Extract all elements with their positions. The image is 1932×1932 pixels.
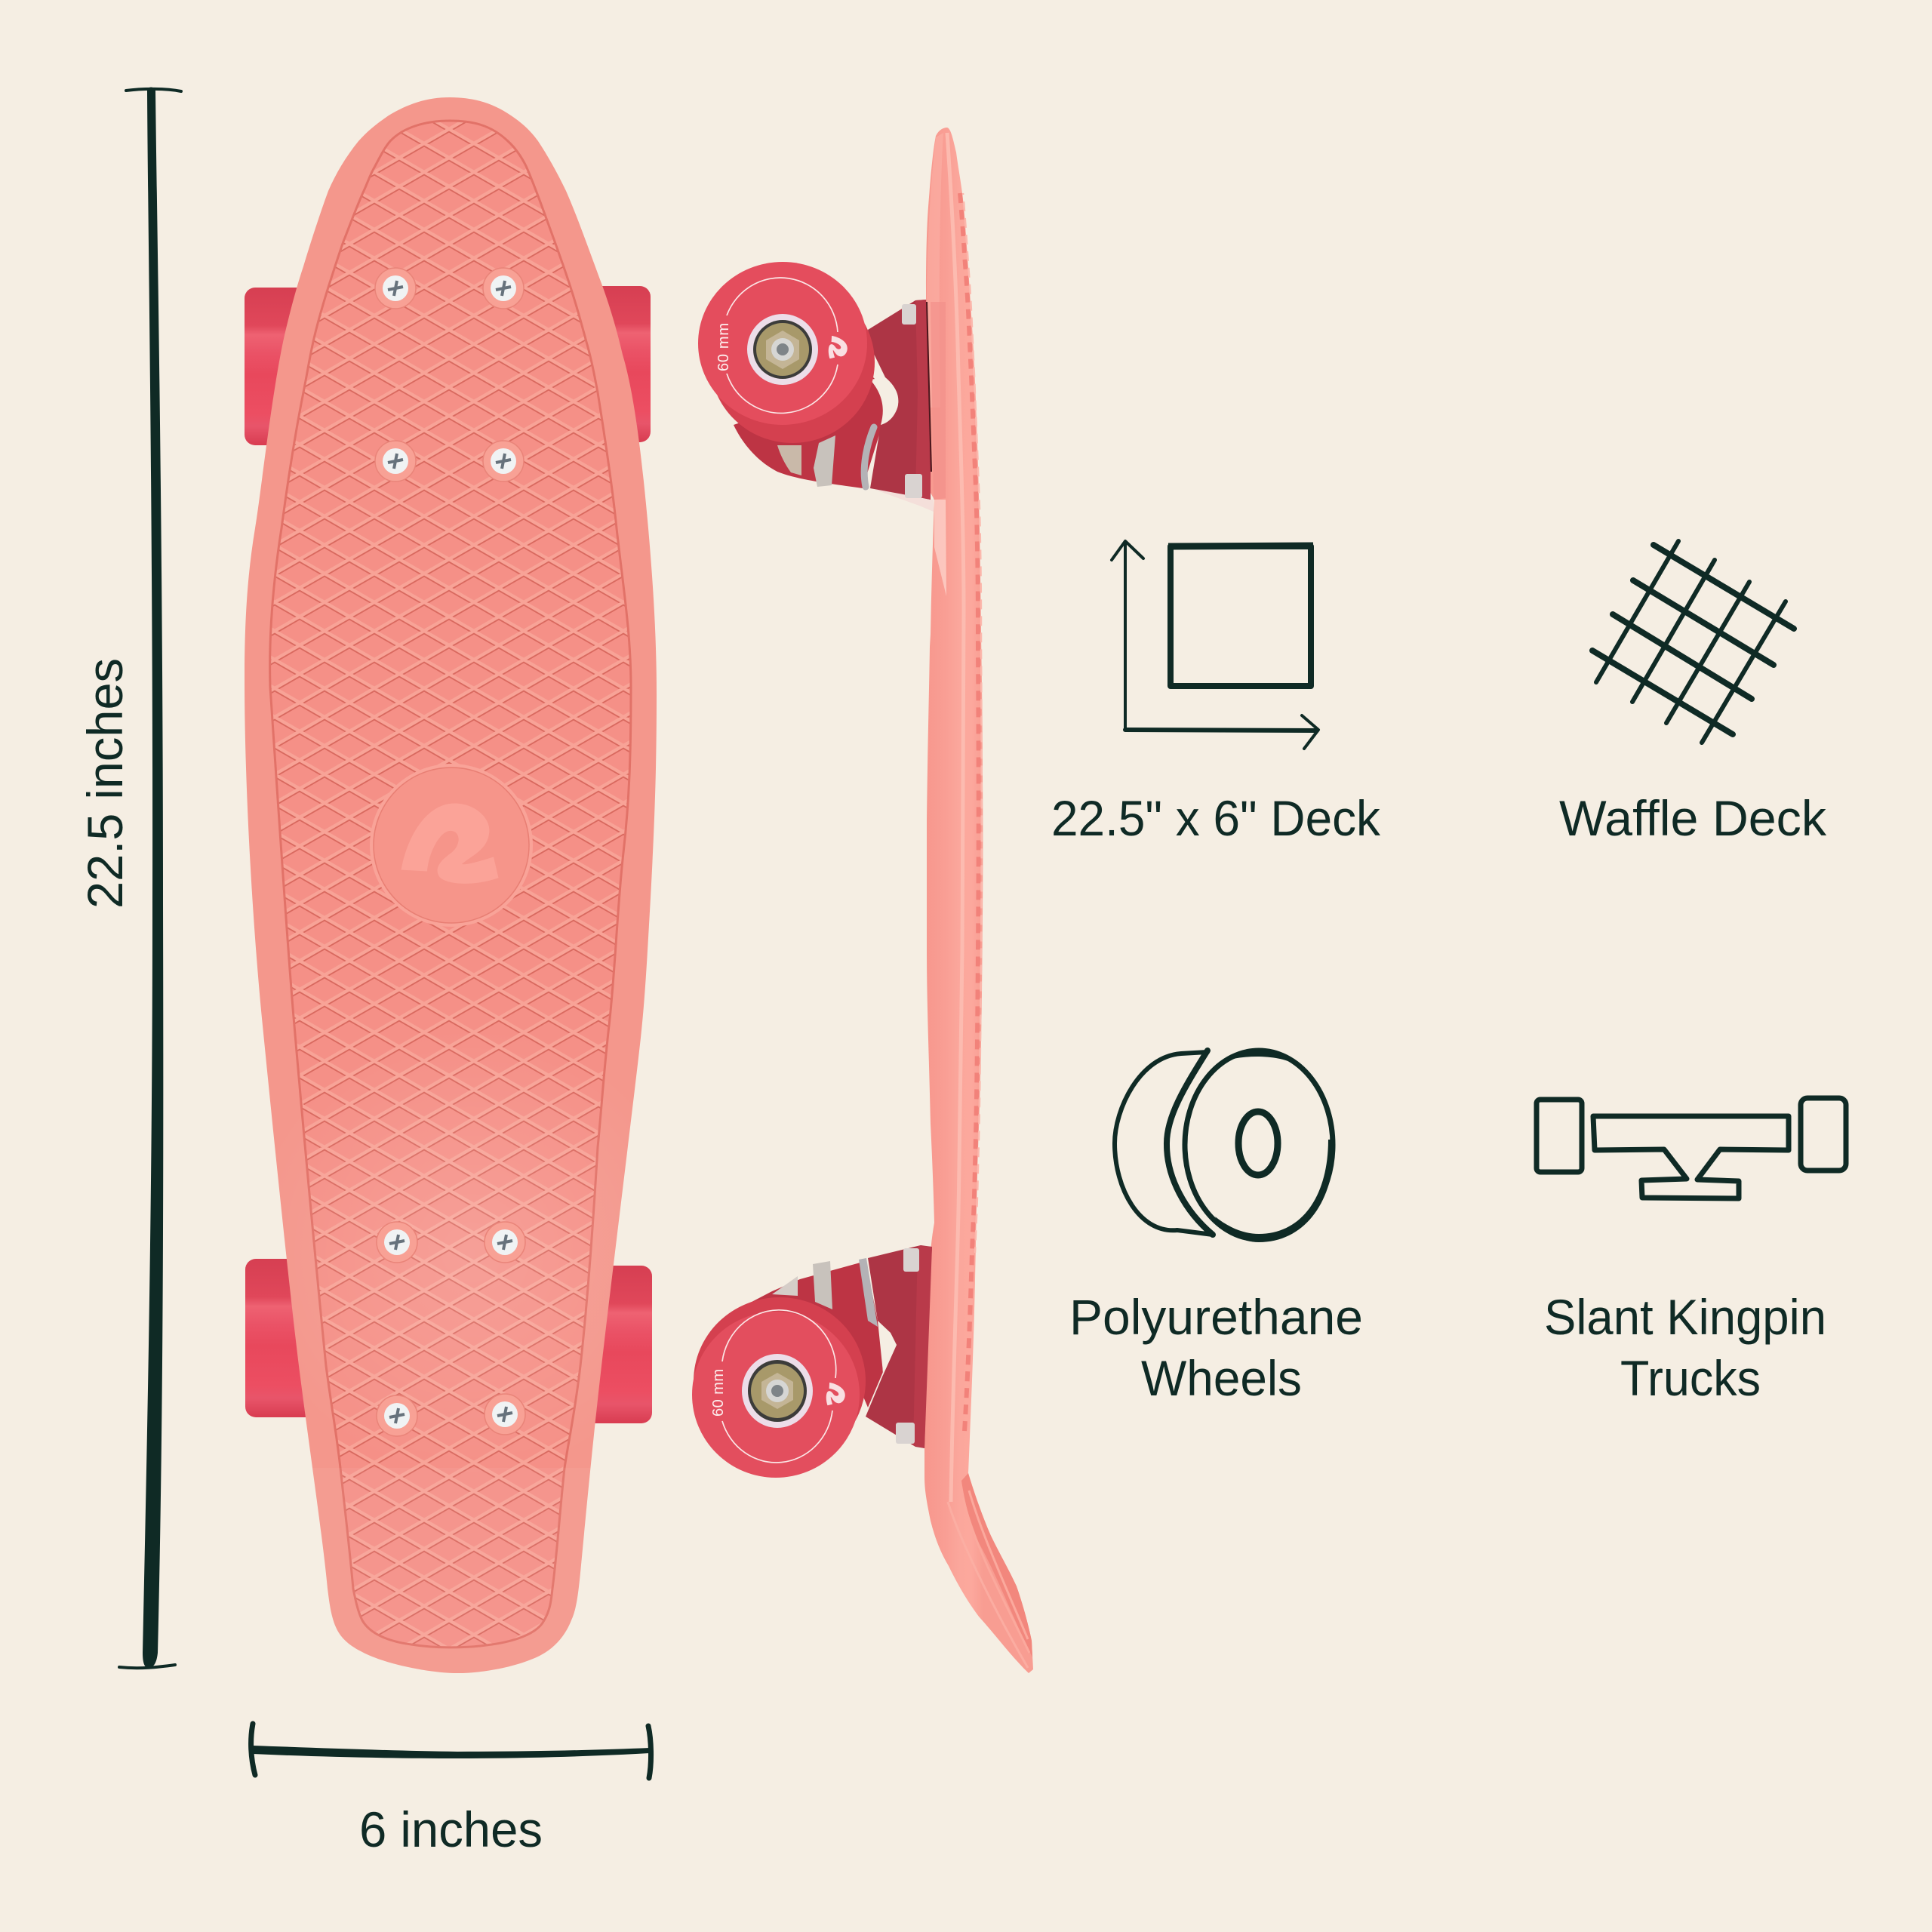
seam <box>927 302 931 472</box>
width label: 6 inches <box>359 1801 543 1857</box>
height measure line <box>143 88 163 1668</box>
label <box>1544 1289 1826 1406</box>
surface highlight <box>331 1112 595 1392</box>
baseplate edge <box>913 1246 932 1448</box>
wheel face <box>698 262 867 425</box>
bushing washer <box>814 435 835 487</box>
label <box>1069 1289 1363 1406</box>
icon: wheel <box>1115 1051 1334 1242</box>
wheel face <box>692 1312 860 1478</box>
kingpin ring <box>859 1258 878 1327</box>
truck mount shadow <box>931 302 946 500</box>
top cap <box>126 89 181 91</box>
glare patch <box>934 500 946 596</box>
kingpin gap <box>870 377 898 425</box>
bolts <box>896 1248 919 1444</box>
lower tail tint <box>242 1468 664 1679</box>
icon: truck <box>1537 1098 1846 1198</box>
baseplate edge <box>915 300 931 500</box>
bearing <box>742 1354 813 1428</box>
wheel body <box>694 1297 866 1465</box>
feature: deck size <box>1051 541 1381 846</box>
kicktail texture <box>948 1473 1032 1668</box>
front truck <box>698 262 934 512</box>
label: Polyurethane <box>1069 1289 1363 1345</box>
bearing <box>747 314 818 385</box>
right cap <box>648 1726 651 1778</box>
nut <box>777 445 801 475</box>
skateboard side view <box>692 128 1033 1673</box>
wheel ring <box>722 1310 836 1463</box>
feature: trucks <box>1537 1098 1846 1406</box>
rear truck <box>692 1245 932 1478</box>
width dimension <box>251 1724 651 1857</box>
hanger <box>734 377 883 488</box>
long highlight <box>947 133 964 1502</box>
deck outline <box>245 97 657 1673</box>
feature: wheels <box>1069 1051 1363 1406</box>
center logo disc <box>370 764 533 927</box>
sliver plate <box>873 489 934 512</box>
nut <box>772 1276 798 1296</box>
wheels behind deck <box>245 286 652 1423</box>
height dimension <box>77 88 181 1668</box>
wheel size label: 60 mm <box>710 1369 727 1417</box>
logo mark <box>401 804 499 884</box>
bolts <box>902 304 922 498</box>
kingpin ring <box>864 427 874 487</box>
skateboard top view <box>245 97 657 1673</box>
wheel ring <box>727 278 838 413</box>
edge waffle ridges <box>960 193 979 1432</box>
wheel size label: 60 mm <box>715 323 732 371</box>
height label: 22.5 inches <box>77 658 133 909</box>
baseplate <box>866 1245 932 1448</box>
label: 22.5" x 6" Deck <box>1051 790 1381 846</box>
kingpin gap <box>878 1321 897 1375</box>
label: Trucks <box>1620 1350 1761 1406</box>
waffle texture <box>270 121 631 1647</box>
wheel logo <box>829 336 848 358</box>
icon: waffle grid <box>1592 541 1794 743</box>
bottom cap <box>119 1665 175 1668</box>
width measure line <box>253 1746 650 1758</box>
label: Wheels <box>1141 1350 1302 1406</box>
wheel logo <box>826 1383 845 1405</box>
upper light edge <box>927 133 943 408</box>
feature: waffle deck <box>1559 541 1827 846</box>
side deck <box>924 128 1033 1673</box>
wheel body <box>710 281 875 443</box>
icon: deck dimensions <box>1112 541 1318 749</box>
label: Slant Kingpin <box>1544 1289 1826 1345</box>
mounting screws <box>375 268 525 1436</box>
label: Waffle Deck <box>1559 790 1827 846</box>
bushing washer <box>813 1261 832 1309</box>
baseplate <box>868 300 931 500</box>
left cap <box>251 1724 255 1775</box>
hanger <box>737 1261 883 1407</box>
